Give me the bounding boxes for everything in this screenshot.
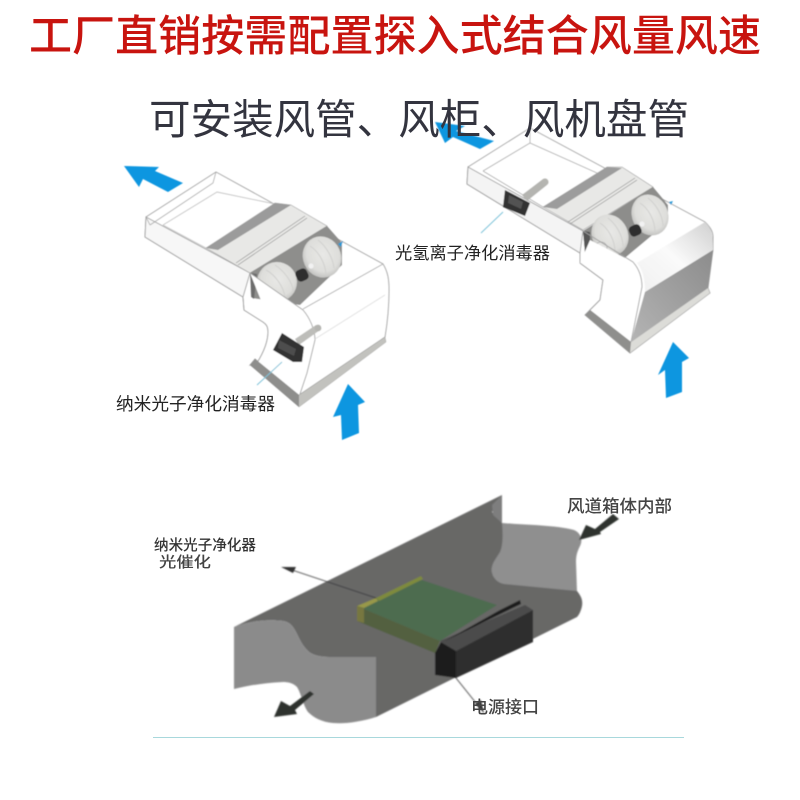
- duct main surface: [234, 495, 582, 717]
- subtitle: 可安装风管、风柜、风机盘管: [149, 96, 689, 143]
- title: 工厂直销按需配置探入式结合风量风速: [29, 13, 761, 61]
- left unit fan cavity: [250, 226, 342, 305]
- arrow: right outlet: [435, 122, 494, 149]
- duct box diagram: [234, 495, 619, 723]
- nano photon filter: [357, 576, 497, 653]
- label: nano photon purifier: 纳米光子净化器: [154, 537, 256, 554]
- right unit fans: [585, 188, 675, 262]
- left unit duct body: [145, 172, 389, 395]
- label: right purifier: 光氢离子净化消毒器: [395, 243, 550, 263]
- right air handling unit: [435, 122, 713, 398]
- left air handling unit: [124, 166, 389, 440]
- label: photocatalysis: 光催化: [159, 554, 211, 571]
- right unit grey band: [543, 167, 653, 230]
- arrow: power leader: [456, 678, 484, 713]
- arrow: left outlet: [124, 166, 183, 192]
- icon: left purifier box: [273, 333, 304, 362]
- arrow: left inlet: [333, 384, 365, 440]
- icon: right purifier box: [503, 190, 530, 216]
- label: duct interior: 风道箱体内部: [567, 496, 672, 516]
- left unit front panel: [244, 273, 315, 395]
- right unit front panels: [580, 240, 642, 342]
- right unit fan cavity: [583, 187, 668, 262]
- power box: [435, 600, 533, 678]
- left unit purifier probe: [295, 325, 320, 345]
- right unit duct body: [467, 128, 713, 353]
- left unit fans: [250, 230, 348, 309]
- left unit bottom flange: [250, 337, 386, 407]
- arrow: duct inlet: [579, 514, 619, 540]
- left unit grey band: [206, 203, 327, 273]
- far duct wall: [490, 523, 581, 592]
- arrow: duct outlet: [274, 691, 314, 717]
- left unit fan shaft: [294, 267, 310, 283]
- duct front lower lobe: [234, 620, 376, 723]
- arrow: filter leader: [281, 567, 376, 598]
- right unit purifier probe: [522, 179, 547, 201]
- right unit fan shaft: [627, 223, 643, 238]
- label: power port: 电源接口: [471, 698, 539, 717]
- arrow: right pointer: [481, 212, 503, 233]
- label: left purifier: 纳米光子净化消毒器: [116, 394, 275, 414]
- right unit bottom flange: [585, 288, 710, 353]
- arrow: left pointer: [257, 362, 282, 385]
- arrow: right inlet: [658, 342, 689, 398]
